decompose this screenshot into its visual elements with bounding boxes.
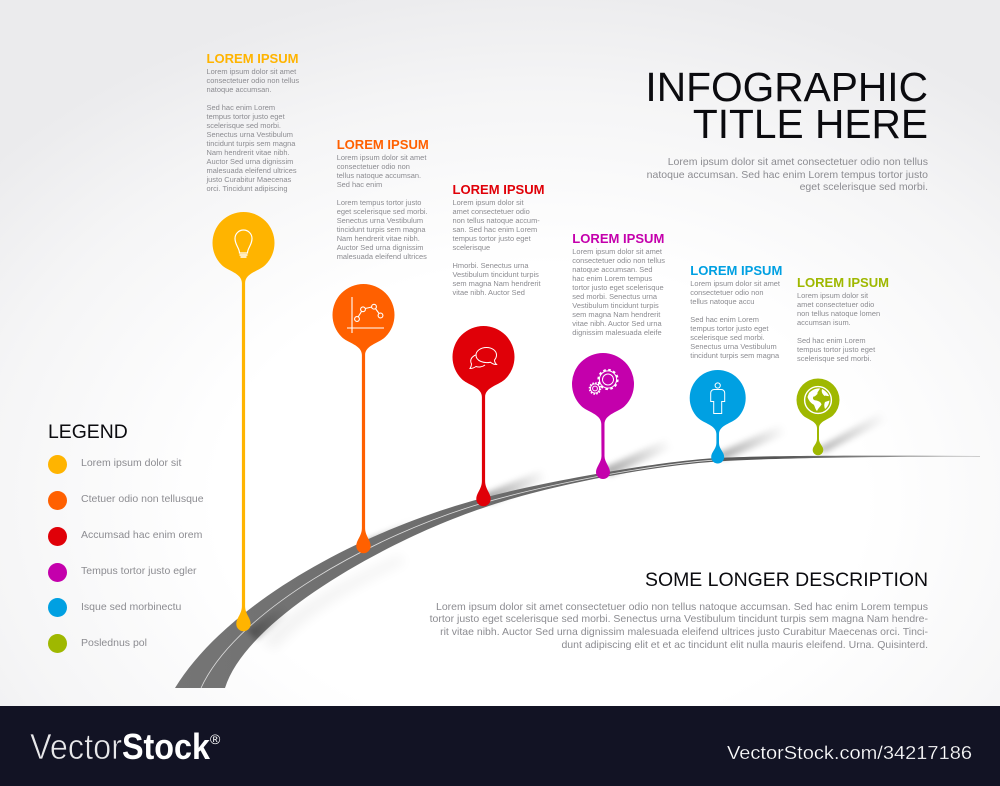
text block: item 6: accumsan isum. [797, 318, 851, 327]
text block: item 1: Sed hac enim Lorem [206, 103, 275, 112]
icon: gears [590, 370, 618, 394]
footer logo [30, 726, 221, 767]
text block: item 5: tempus tortor justo eget [690, 324, 768, 333]
text block: item 2 [336, 136, 429, 261]
text block: item 5: consectetuer odio non [690, 288, 763, 297]
text block: item 2: Nam hendrerit vitae nibh. [337, 234, 420, 243]
legend [48, 421, 204, 653]
legend: Tempus tortor justo egler [81, 565, 197, 577]
intro text: Lorem ipsum dolor sit amet consectetuer odio non tellus [668, 156, 928, 168]
text block: item 3: Hmorbi. Senectus urna [452, 261, 529, 270]
text block: item 3: Vestibulum tincidunt turpis [452, 270, 539, 279]
description text: rit vitae nibh. Auctor Sed urna dignissim malesuada eleifend ultrices justo Curabitur Maecenas orci. Tinci- [440, 626, 928, 638]
text block: item 3: tempus tortor justo eget [452, 234, 531, 243]
text block: item 1: Auctor Sed urna dignissim [206, 157, 293, 166]
legend: Isque sed morbinectu [81, 601, 181, 613]
text block: item 1: Nam hendrerit vitae nibh. [206, 148, 290, 157]
pin 5: person [690, 370, 746, 464]
text block: item 2: Lorem ipsum dolor sit amet [337, 153, 426, 162]
text block: item 3: sem magna Nam hendrerit [452, 279, 541, 288]
text block: item 2: tellus natoque accumsan. [337, 171, 421, 180]
text block: item 4: hac enim Lorem tempus [572, 274, 652, 283]
text block: item 1: scelerisque sed morbi. [206, 121, 281, 130]
pin 2: chart [332, 284, 394, 553]
text block: item 5: Sed hac enim Lorem [690, 315, 759, 324]
title: INFOGRAPHIC [645, 64, 928, 110]
pin 3: chat [452, 326, 514, 506]
title [645, 64, 928, 147]
text block: item 5: scelerisque sed morbi. [690, 333, 765, 342]
pin 6: globe [796, 378, 840, 455]
text block: item 4 [572, 230, 665, 337]
text block: item 1: Senectus urna Vestibulum [206, 130, 293, 139]
text block: item 4: sed morbi. Senectus urna [572, 292, 657, 301]
text block: item 6: Lorem ipsum dolor sit [797, 291, 868, 300]
text block: item 6 [797, 274, 889, 363]
text block: item 5: tellus natoque accu [690, 297, 754, 306]
legend item 6 [48, 634, 147, 653]
text block: item 4: tortor justo eget scelerisque [572, 283, 664, 292]
text block: item 5: Senectus urna Vestibulum [690, 342, 777, 351]
text block: item 4: dignissim malesuada eleife [572, 328, 662, 337]
text block: item 3: amet consectetuer odio [452, 207, 530, 216]
text block: item 5: LOREM IPSUM [690, 262, 782, 278]
text block: item 2: Senectus urna Vestibulum [337, 216, 423, 225]
text block: item 3: scelerisque [452, 243, 490, 252]
text block: item 3: non tellus natoque accum- [452, 216, 540, 225]
icon: person [711, 383, 725, 414]
footer logo: Vector [30, 726, 122, 767]
footer url: VectorStock.com/34217186 [727, 742, 972, 763]
text block: item 1: LOREM IPSUM [206, 50, 299, 66]
text block: item 5 [690, 262, 782, 360]
text block: item 3: LOREM IPSUM [452, 182, 545, 196]
pin 1: idea [212, 212, 274, 631]
text block: item 1: Lorem ipsum dolor sit amet [206, 67, 296, 76]
description heading: SOME LONGER DESCRIPTION [645, 569, 928, 591]
text block: item 6: amet consectetuer odio [797, 300, 874, 309]
legend: Lorem ipsum dolor sit [81, 456, 181, 468]
text block: item 1: malesuada eleifend ultrices [206, 166, 297, 175]
legend: Ctetuer odio non tellusque [81, 492, 204, 504]
text block: item 2: eget scelerisque sed morbi. [337, 207, 428, 216]
text block: item 1: orci. Tincidunt adipiscing [206, 184, 288, 193]
text block: item 1: natoque accumsan. [206, 85, 271, 94]
text block: item 4: vitae nibh. Auctor Sed urna [572, 319, 662, 328]
text block: item 6: non tellus natoque lomen [797, 309, 880, 318]
text block: item 5: tincidunt turpis sem magna [690, 351, 779, 360]
text block: item 3 [452, 182, 545, 297]
legend item 3 [48, 527, 202, 546]
text block: item 4: consectetuer odio non tellus [572, 256, 665, 265]
legend item 2 [48, 491, 204, 510]
pin 4: gears [572, 353, 634, 479]
text block: item 6: tempus tortor justo eget [797, 345, 875, 354]
legend heading: LEGEND [48, 421, 128, 443]
text block: item 2: Auctor Sed urna dignissim [337, 243, 424, 252]
text block: item 3: vitae nibh. Auctor Sed [452, 288, 525, 297]
description text: tortor justo eget scelerisque sed morbi. Senectus urna Vestibulum tincidunt turpis sem magna Nam hendre- [430, 613, 928, 625]
footer band [0, 706, 1000, 786]
intro text: natoque accumsan. Sed hac enim Lorem tempus tortor justo [647, 168, 928, 180]
intro text [647, 156, 928, 193]
text block: item 1: consectetuer odio non tellus [206, 76, 299, 85]
text block: item 6: LOREM IPSUM [797, 274, 889, 290]
text block: item 4: sem magna Nam hendrerit [572, 310, 660, 319]
footer logo: ® [210, 731, 221, 747]
text block: item 1: tincidunt turpis sem magna [206, 139, 295, 148]
text block: item 4: Lorem ipsum dolor sit amet [572, 247, 662, 256]
icon: line chart [347, 297, 384, 333]
text block: item 1: tempus tortor justo eget [206, 112, 285, 121]
intro text: eget scelerisque sed morbi. [800, 181, 928, 193]
description text: Lorem ipsum dolor sit amet consectetuer odio non tellus natoque accumsan. Sed hac enim Lorem tempus [436, 600, 928, 612]
icon: globe [805, 387, 831, 413]
text block: item 3: Lorem ipsum dolor sit [452, 198, 524, 207]
road shadows [262, 410, 892, 650]
description text [430, 600, 928, 651]
road [175, 456, 980, 688]
legend item 4 [48, 563, 197, 582]
text block: item 1: justo Curabitur Maecenas [206, 175, 291, 184]
legend item 1 [48, 455, 182, 474]
legend: Accumsad hac enim orem [81, 529, 202, 541]
text block: item 4: natoque accumsan. Sed [572, 265, 653, 274]
text block: item 6: scelerisque sed morbi. [797, 354, 871, 363]
legend item 5 [48, 598, 181, 617]
text block: item 4: LOREM IPSUM [572, 230, 664, 246]
text block: item 2: malesuada eleifend ultrices [337, 252, 427, 261]
text block: item 2: tincidunt turpis sem magna [337, 225, 426, 234]
text block: item 2: consectetuer odio non [337, 162, 410, 171]
title: TITLE HERE [693, 101, 928, 147]
text block: item 4: Vestibulum tincidunt turpis [572, 301, 659, 310]
legend: Poslednus pol [81, 637, 147, 649]
footer logo: Stock [122, 726, 211, 767]
text block: item 2: Lorem tempus tortor justo [337, 198, 421, 207]
text block: item 2: LOREM IPSUM [337, 136, 429, 152]
text block: item 3: san. Sed hac enim Lorem [452, 225, 537, 234]
text block: item 2: Sed hac enim [337, 180, 382, 189]
icon: light bulb [235, 230, 252, 257]
text block: item 6: Sed hac enim Lorem [797, 336, 866, 345]
icon: speech bubbles [470, 348, 496, 368]
description text: dunt adipiscing elit et et ac tincidunt elit nulla mauris eleifend. Urna. Quisinterd. [561, 639, 928, 651]
text block: item 5: Lorem ipsum dolor sit amet [690, 279, 780, 288]
text block: item 1 [206, 50, 299, 193]
